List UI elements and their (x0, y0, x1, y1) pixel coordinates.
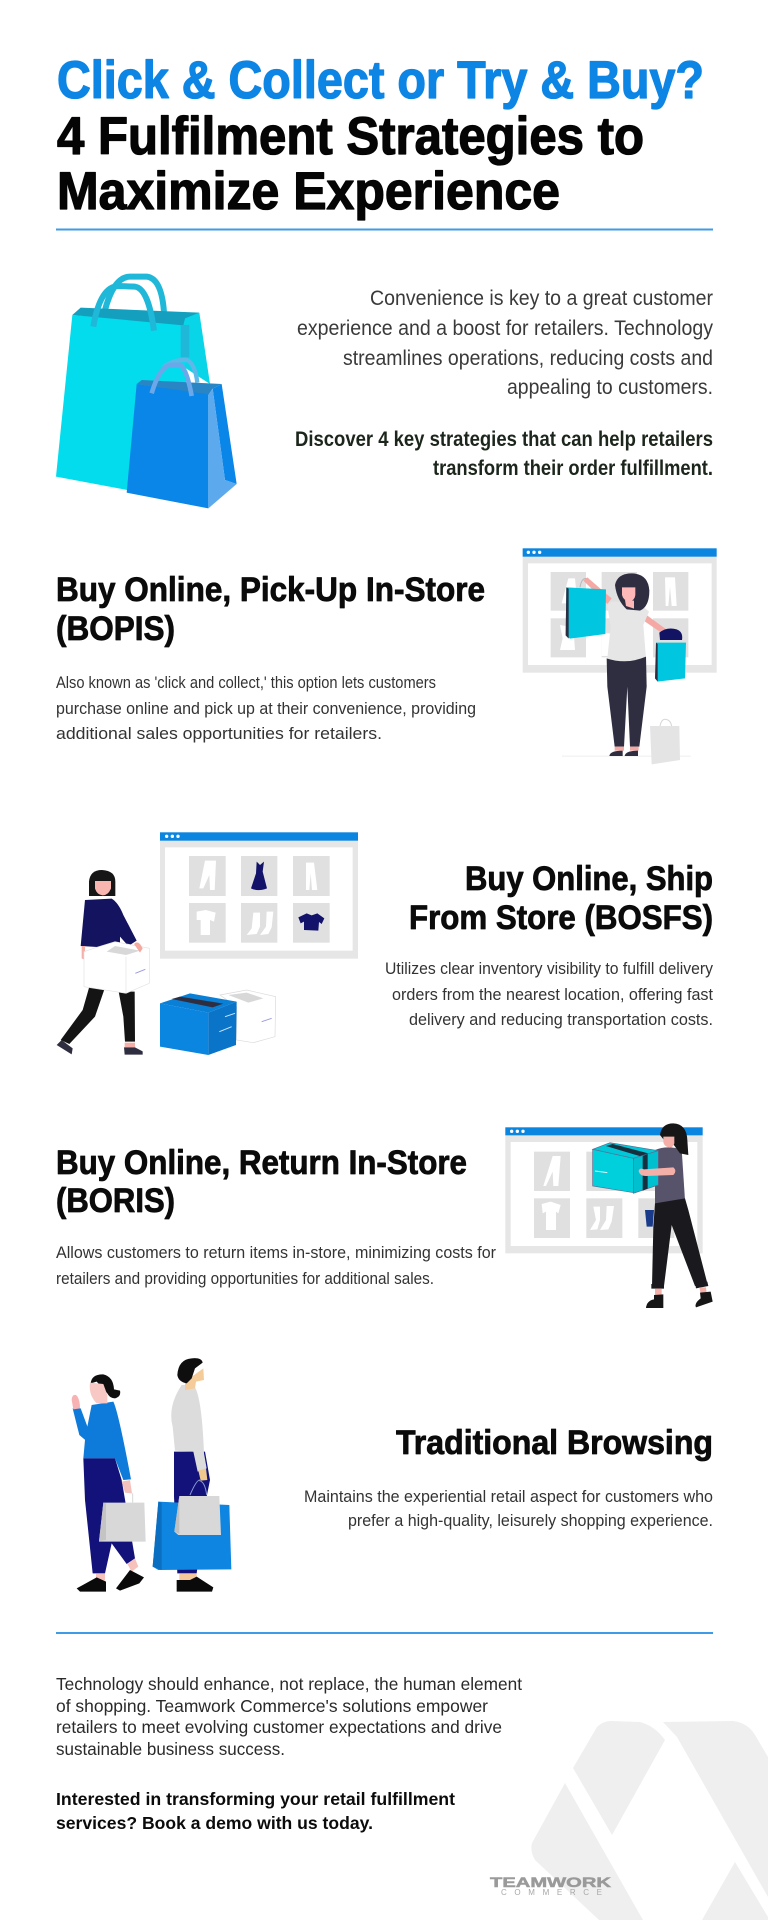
intro text: Convenience is key to a great customer (370, 286, 713, 310)
intro text (295, 286, 713, 480)
intro text: streamlines operations, reducing costs and (343, 346, 713, 370)
section heading: BOPIS: (BOPIS) (56, 610, 175, 648)
title: Maximize Experience (57, 162, 560, 221)
call to action (56, 1789, 455, 1833)
section heading: BOPIS (56, 571, 485, 648)
illustration: shoppers with bags (72, 1358, 231, 1592)
text: BOPIS description (56, 673, 476, 743)
title (57, 51, 704, 221)
text: BOPIS description: Also known as 'click and collect,' this option lets customers (56, 673, 436, 692)
text: BOPIS description: additional sales opportunities for retailers. (56, 724, 382, 743)
text: BOSFS description (385, 959, 713, 1029)
text: BORIS description: Allows customers to return items in-store, minimizing costs for (56, 1243, 496, 1262)
intro text: Discover 4 key strategies that can help retailers (295, 427, 713, 451)
text: BOSFS description: orders from the nearest location, offering fast (392, 985, 713, 1004)
illustration: woman carrying a box (57, 832, 358, 1055)
logo: Teamwork Commerce (490, 1874, 611, 1897)
text: Traditional Browsing description: Maintains the experiential retail aspect for customers who (304, 1487, 713, 1506)
section heading: BOSFS: From Store (BOSFS) (409, 899, 713, 937)
section heading: BORIS: Buy Online, Return In-Store (56, 1144, 467, 1182)
title: 4 Fulfilment Strategies to (57, 107, 644, 166)
section heading: Traditional Browsing: Traditional Browsing (396, 1424, 713, 1462)
call to action: Interested in transforming your retail fulfillment (56, 1789, 455, 1809)
call to action: services? Book a demo with us today. (56, 1813, 373, 1833)
section heading: BOSFS (409, 860, 713, 937)
section heading: BORIS: (BORIS) (56, 1182, 175, 1220)
text: BORIS description: retailers and providing opportunities for additional sales. (56, 1269, 434, 1288)
closing paragraph (56, 1674, 522, 1759)
text: BORIS description (56, 1243, 496, 1288)
closing paragraph: retailers to meet evolving customer expectations and drive (56, 1717, 502, 1737)
closing paragraph: sustainable business success. (56, 1739, 285, 1759)
illustration: woman holding a parcel (505, 1123, 713, 1308)
logo: Teamwork Commerce: COMMERCE (501, 1888, 602, 1897)
closing paragraph: of shopping. Teamwork Commerce's solutions empower (56, 1696, 488, 1716)
intro text: appealing to customers. (507, 375, 713, 399)
intro text: experience and a boost for retailers. Technology (297, 316, 713, 340)
section heading: BOSFS: Buy Online, Ship (465, 860, 713, 898)
logo: Teamwork Commerce: TEAMWORK (490, 1874, 611, 1890)
icon: shopping bags (56, 277, 237, 508)
closing paragraph: Technology should enhance, not replace, the human element (56, 1674, 522, 1694)
text: BOSFS description: delivery and reducing transportation costs. (409, 1010, 713, 1029)
section heading: BORIS (56, 1144, 467, 1220)
section heading: BOPIS: Buy Online, Pick-Up In-Store (56, 571, 485, 609)
text: Traditional Browsing description: prefer a high-quality, leisurely shopping experience. (348, 1511, 713, 1530)
illustration: woman holding shopping bags (523, 548, 717, 764)
intro text: transform their order fulfillment. (433, 456, 713, 480)
logo watermark (531, 1721, 768, 1920)
text: BOPIS description: purchase online and pick up at their convenience, providing (56, 699, 476, 718)
text: Traditional Browsing description (304, 1487, 713, 1530)
text: BOSFS description: Utilizes clear inventory visibility to fulfill delivery (385, 959, 713, 978)
